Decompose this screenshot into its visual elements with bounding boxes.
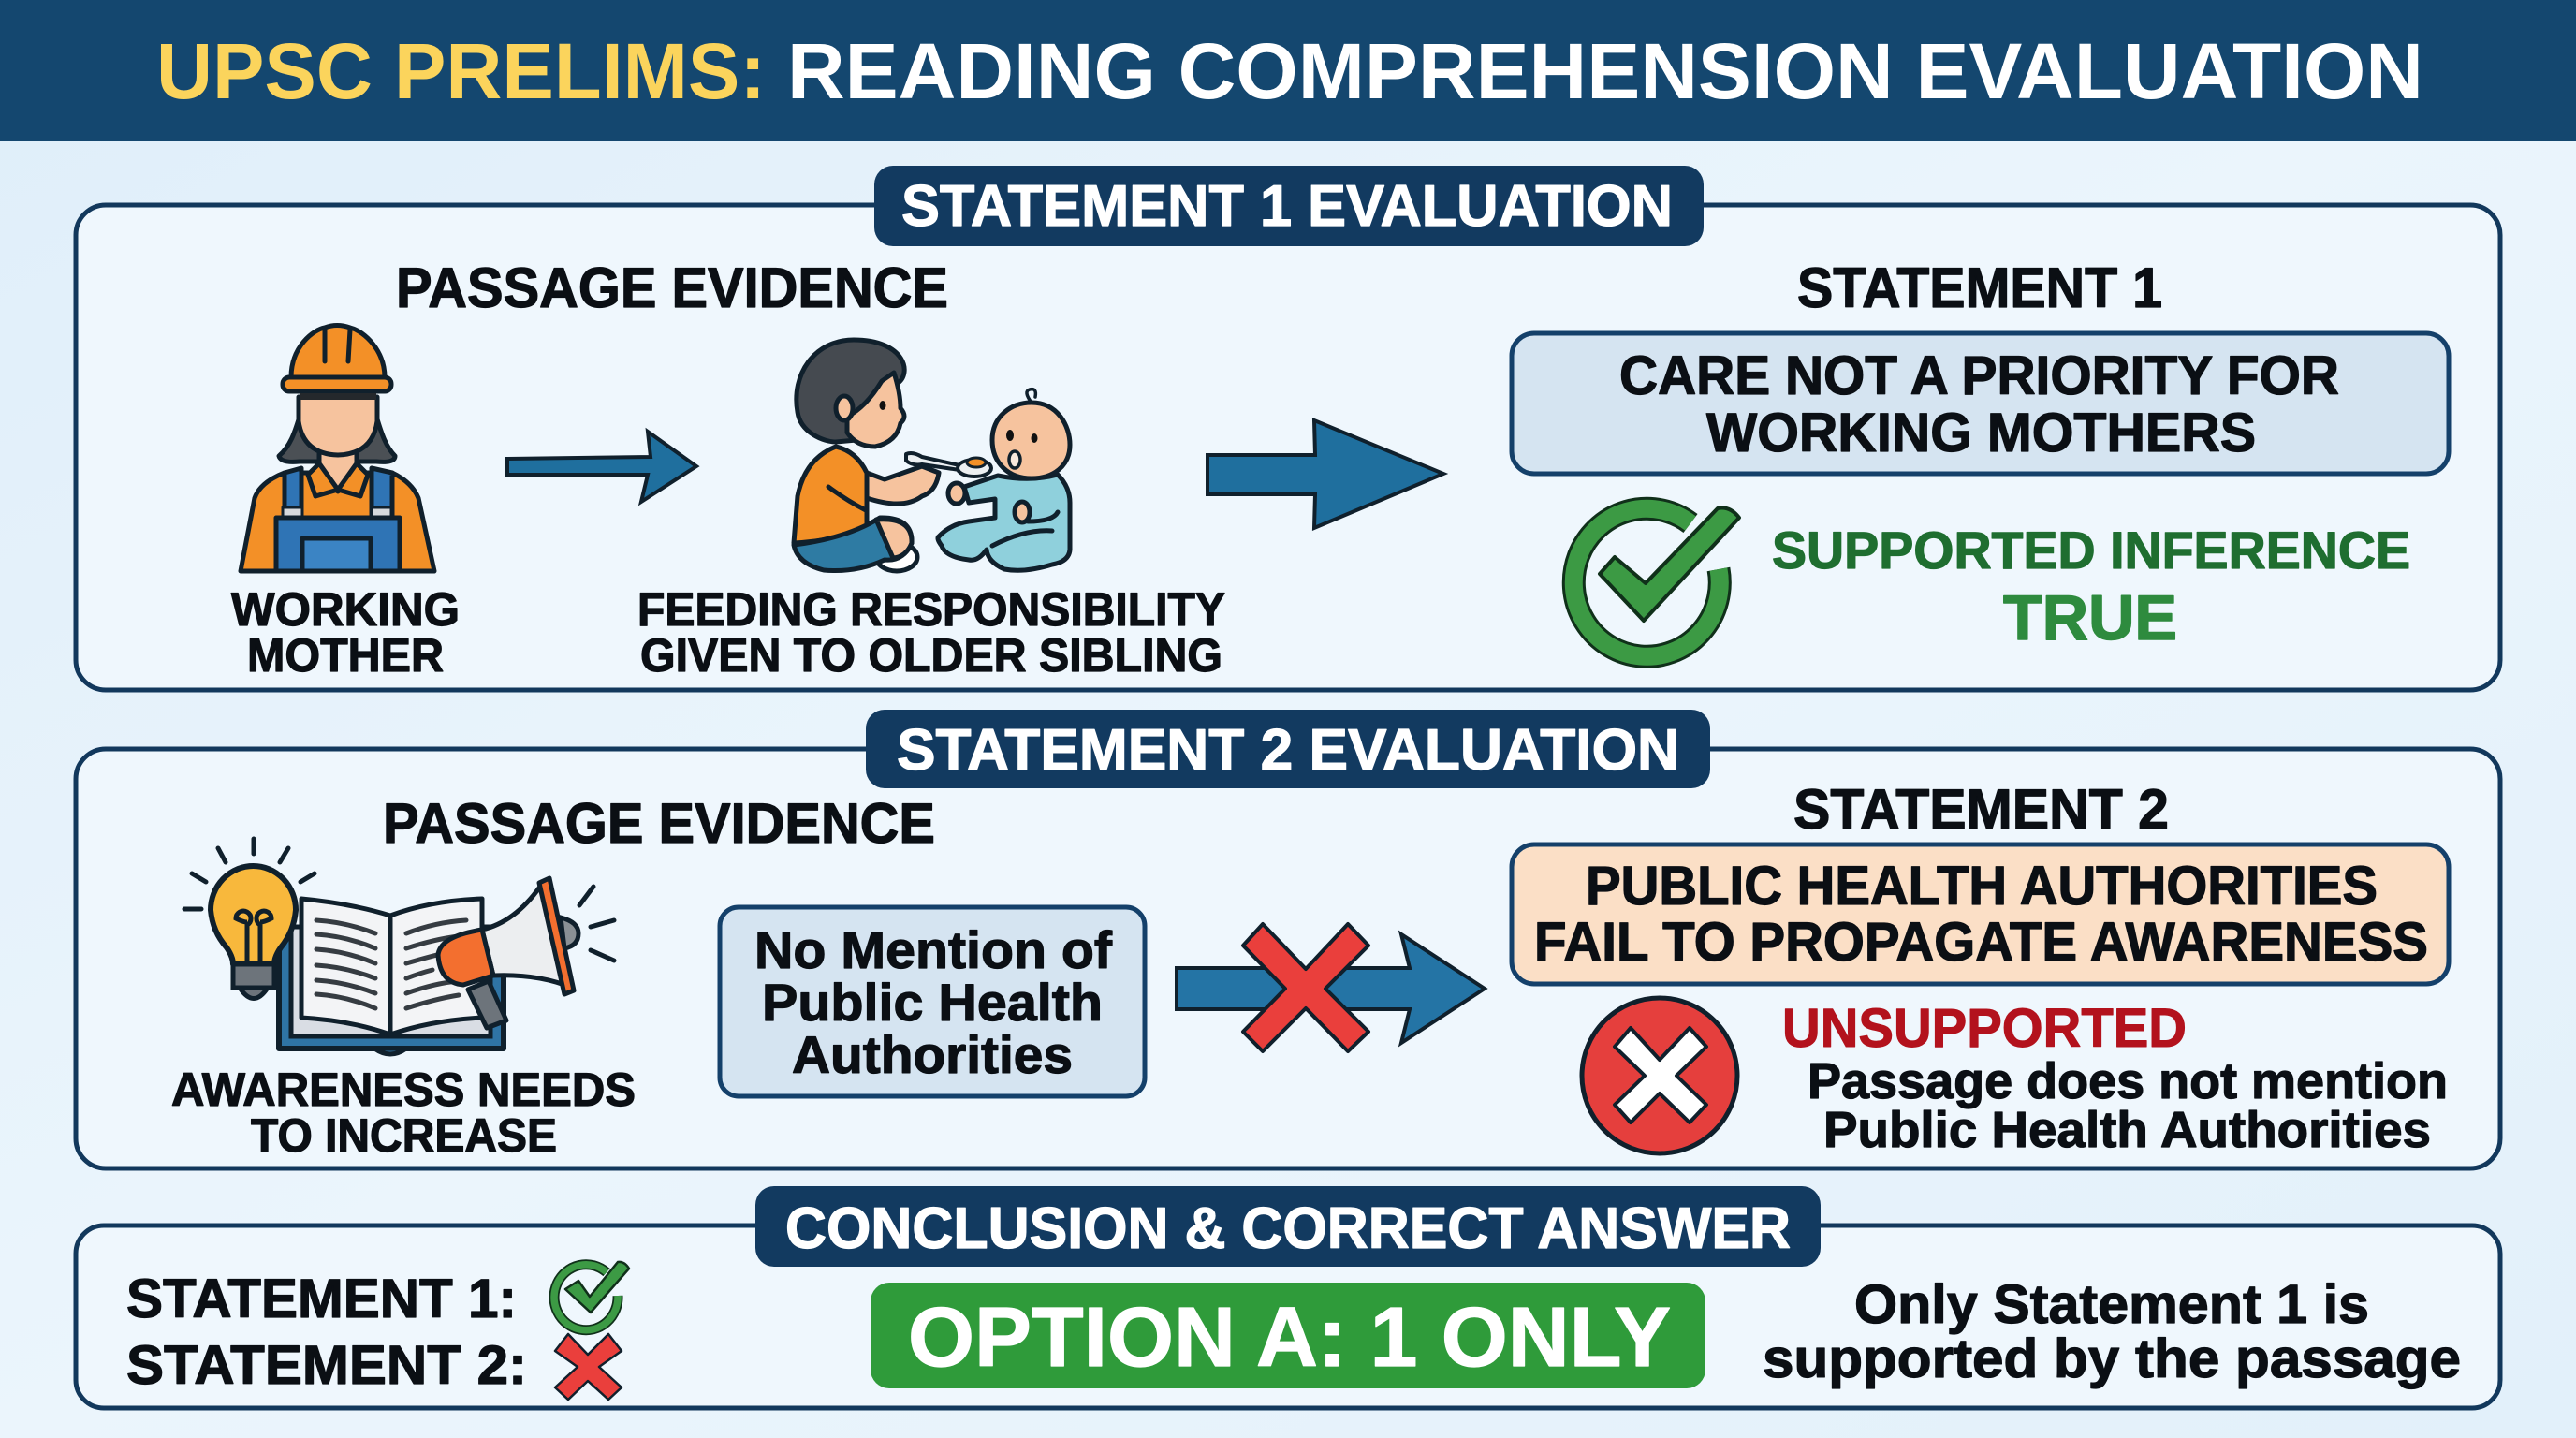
sibling label: GIVEN TO OLDER SIBLING [640, 629, 1222, 682]
title banner [0, 0, 2576, 141]
working mother label: MOTHER [247, 629, 444, 682]
statement 2 box: PUBLIC HEALTH AUTHORITIES [1586, 856, 2378, 917]
panel: statement 1 evaluation [76, 166, 2500, 690]
statement tally labels: STATEMENT 2: [126, 1335, 527, 1396]
no mention box: Public Health [762, 973, 1103, 1032]
unsupported verdict: UNSUPPORTED [1782, 998, 2187, 1059]
icon: small check [554, 1262, 629, 1330]
arrow crossed out [1177, 924, 1485, 1051]
icon: working mother [241, 326, 434, 571]
supported inference verdict [1772, 521, 2410, 653]
panel: conclusion and correct answer [76, 1186, 2500, 1408]
arrow: evidence to statement 1 [1208, 420, 1443, 528]
statement 2 box: FAIL TO PROPAGATE AWARENESS [1534, 912, 2428, 973]
statement tally labels: STATEMENT 1: [126, 1269, 517, 1329]
sibling label [637, 583, 1225, 682]
conclusion note [1763, 1274, 2461, 1389]
unsupported verdict: Public Health Authorities [1823, 1102, 2431, 1158]
awareness label: AWARENESS NEEDS [171, 1064, 636, 1116]
statement 2 box [1512, 844, 2449, 984]
passage evidence heading: PASSAGE EVIDENCE [383, 792, 935, 855]
no mention box [720, 907, 1145, 1096]
icon: green check [1573, 507, 1739, 656]
statement 2 heading: STATEMENT 2 [1793, 778, 2169, 841]
conclusion note: Only Statement 1 is [1854, 1274, 2369, 1335]
statement 1 header pill: STATEMENT 1 EVALUATION [901, 174, 1673, 239]
awareness label: TO INCREASE [251, 1109, 557, 1162]
sibling label: FEEDING RESPONSIBILITY [637, 583, 1225, 636]
no mention box: Authorities [792, 1025, 1073, 1084]
passage evidence heading: PASSAGE EVIDENCE [396, 257, 948, 319]
icon: red cross [1582, 998, 1737, 1153]
icon: small cross [555, 1334, 622, 1400]
conclusion header pill: CONCLUSION & CORRECT ANSWER [785, 1196, 1791, 1261]
unsupported verdict: Passage does not mention [1808, 1053, 2448, 1109]
statement tally labels [126, 1269, 527, 1396]
arrow: mother to sibling [507, 432, 696, 502]
title banner: UPSC PRELIMS: [156, 27, 766, 115]
supported inference verdict: SUPPORTED INFERENCE [1772, 521, 2410, 580]
icon: sibling feeding baby [794, 340, 1070, 571]
panel: statement 2 evaluation [76, 710, 2500, 1168]
unsupported verdict [1782, 998, 2448, 1158]
statement 1 box: CARE NOT A PRIORITY FOR [1619, 345, 2339, 406]
statement 2 header pill: STATEMENT 2 EVALUATION [897, 718, 1679, 783]
awareness label [171, 1064, 636, 1162]
conclusion note: supported by the passage [1763, 1328, 2461, 1389]
statement 1 box [1512, 333, 2449, 474]
working mother label [231, 583, 460, 682]
supported inference verdict: TRUE [2003, 582, 2177, 653]
no mention box: No Mention of [754, 920, 1112, 979]
icon: bulb, book and megaphone [184, 839, 614, 1054]
statement 1 heading: STATEMENT 1 [1797, 257, 2162, 319]
statement 1 box: WORKING MOTHERS [1706, 403, 2256, 463]
title banner: READING COMPREHENSION EVALUATION [787, 27, 2423, 115]
answer badge: OPTION A: 1 ONLY [908, 1291, 1671, 1385]
working mother label: WORKING [231, 583, 460, 636]
